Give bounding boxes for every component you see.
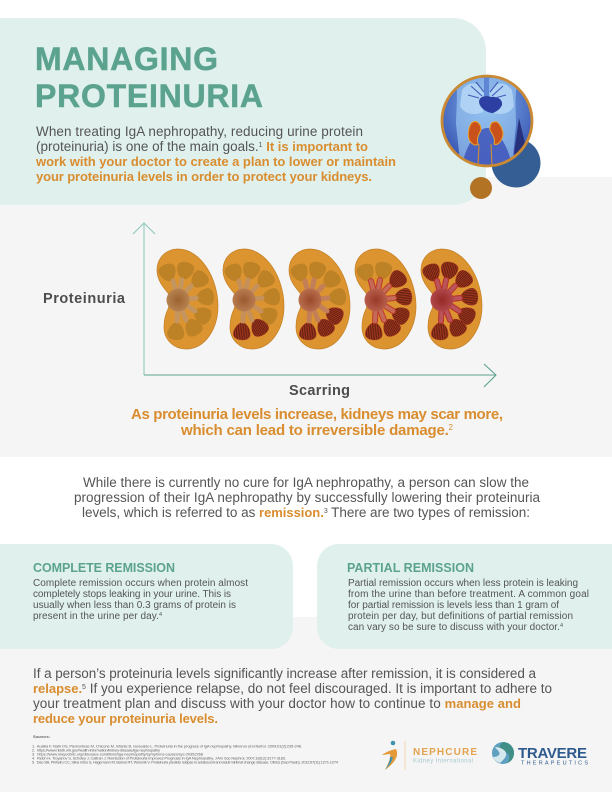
- logo: Travere Therapeutics: TRAVERE: [518, 745, 587, 762]
- panel: complete remission: [0, 544, 293, 649]
- text: partial remission: protein per day, but definitions of partial remission: [348, 611, 573, 622]
- decorative circle: orange: [470, 177, 492, 199]
- text block: relapse: your treatment plan and discuss with your doctor how to continue to manage and: [33, 696, 521, 711]
- title: MANAGING: [35, 41, 218, 77]
- chart caption: 2: [449, 423, 454, 432]
- text: partial remission: 4: [560, 623, 563, 629]
- intro text: your proteinuria levels in order to protect your kidneys.: [36, 169, 372, 184]
- panel: partial remission: [317, 544, 612, 649]
- logo: Travere Therapeutics: THERAPEUTICS: [521, 760, 588, 766]
- text: complete remission: present in the urine per day.: [33, 611, 159, 622]
- panel: proteinuria and scarring chart: [43, 223, 503, 439]
- text: partial remission: can vary so be sure to discuss with your doctor.: [348, 622, 560, 633]
- text block: no cure and remission: There are two types of remission:: [328, 505, 530, 520]
- text: partial remission: Partial remission occurs when less protein is leaking: [348, 578, 578, 589]
- sources: 4. Reich H, Troyanov S, Scholey J, Cattran J. Remission of Proteinuria Improves Prognosis in IgA Nephropathy. J Am Soc Nephrol. 2007;18(12):3177-3183.: [32, 756, 286, 760]
- heading: partial remission: PARTIAL REMISSION: [347, 561, 474, 575]
- text: partial remission: [348, 578, 589, 633]
- logo: NephCure: Kidney International: [413, 758, 473, 764]
- sources: [32, 734, 339, 764]
- text block: no cure and remission: 3: [324, 508, 328, 515]
- sources: 3. https://www.mayoclinic.org/diseases-conditions/iga-nephropathy/symptoms-causes/syc-20352268: [32, 752, 204, 756]
- title: PROTEINURIA: [35, 78, 263, 114]
- logo: Travere Therapeutics: [492, 742, 588, 766]
- intro text: 1: [259, 142, 263, 149]
- logo: NephCure: [382, 741, 477, 770]
- intro text: It is important to: [266, 139, 368, 154]
- text block: relapse: If a person’s proteinuria levels significantly increase after remission, it is considered a: [33, 666, 536, 681]
- text block: no cure and remission: progression of their IgA nephropathy by successfully lowering their proteinuria: [74, 490, 540, 505]
- sources: 5. Dao SB, Pinheiro CC, Silva Vdos S, Hagemann M, Barros RT, Woronik V. Proteinuria predicts relapse in adolescent and adult minimal change disease. Clinics (Sao Paulo). 2012;67(11):1271-1274: [32, 760, 339, 764]
- icon: body with kidneys: [440, 75, 534, 170]
- text block: no cure and remission: While there is currently no cure for IgA nephropathy, a person can slow the: [83, 475, 529, 490]
- x axis arrow: [144, 364, 496, 387]
- text: complete remission: [33, 578, 248, 622]
- decorative circle: blue: [492, 138, 540, 188]
- text: complete remission: completely stops leaking in your urine. This is: [33, 589, 231, 600]
- chart caption: As proteinuria levels increase, kidneys may scar more,: [131, 406, 503, 423]
- panel: header: [0, 18, 486, 205]
- intro text: When treating IgA nephropathy, reducing urine protein: [36, 124, 363, 139]
- intro text: [35, 124, 396, 184]
- intro text: (proteinuria) is one of the main goals.: [36, 139, 259, 154]
- kidney 3: [289, 249, 350, 349]
- sources: 1. Ausilia F, Natri OS, Piemontese M, Chicone M, Infante B, Gesualdo L. Proteinuria in the progress of IgA nephropathy. Minerva Urol Nefrol. 2009;61(3):235-248.: [32, 744, 302, 748]
- kidney 4: [355, 249, 416, 349]
- y axis label: Proteinuria: [43, 291, 126, 307]
- text: complete remission: usually when less than 0.3 grams of protein is: [33, 600, 236, 611]
- kidney 5: [421, 249, 482, 349]
- text: partial remission: for partial remission is levels less than 1 gram of: [348, 600, 559, 611]
- kidney 2: [223, 249, 284, 349]
- x axis label: Scarring: [289, 383, 350, 399]
- text: complete remission: Complete remission occurs when protein almost: [33, 578, 248, 589]
- text: complete remission: 4: [159, 612, 162, 618]
- text block: no cure and remission: [74, 475, 540, 520]
- text block: relapse: [33, 666, 552, 726]
- sources: Sources:: [33, 734, 50, 739]
- text block: relapse: reduce your proteinuria levels.: [33, 711, 218, 726]
- sources: 2. https://www.niddk.nih.gov/health-information/kidney-disease/iga-nephropathy: [32, 748, 160, 752]
- text block: relapse: 5: [82, 684, 86, 691]
- intro text: work with your doctor to create a plan to lower or maintain: [35, 154, 396, 169]
- text block: relapse: relapse.: [33, 681, 82, 696]
- text block: relapse: If you experience relapse, do not feel discouraged. It is important to adhere to: [86, 681, 552, 696]
- chart caption: [131, 406, 503, 439]
- chart caption: which can lead to irreversible damage.: [181, 422, 449, 439]
- text: partial remission: from the urine than before treatment. A common goal: [348, 589, 589, 600]
- heading: complete remission: COMPLETE REMISSION: [33, 561, 175, 575]
- background bands: [0, 177, 612, 792]
- y axis arrow: [133, 223, 155, 375]
- logo: NephCure: NEPHCURE: [413, 747, 477, 758]
- title: [35, 41, 263, 114]
- text block: no cure and remission: levels, which is referred to as remission.: [82, 505, 324, 520]
- kidney 1: [157, 249, 218, 349]
